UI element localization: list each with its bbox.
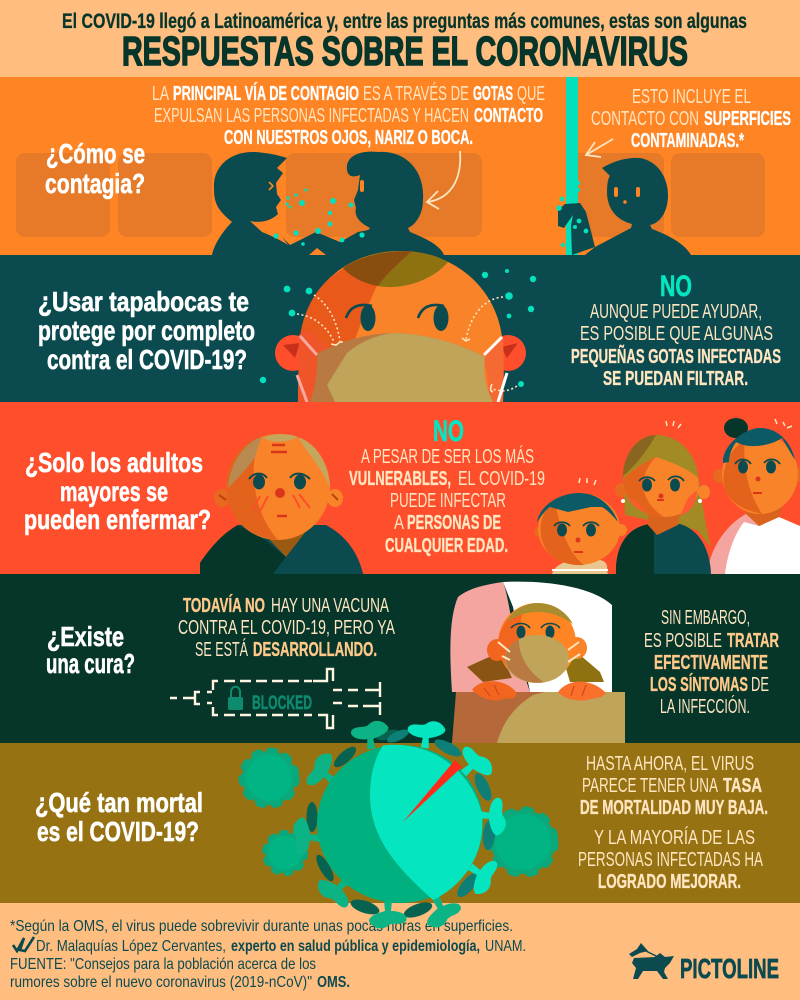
- heading: cura: ¿Existe: [47, 621, 124, 652]
- person coughing: [212, 152, 378, 255]
- text: via de contagio: ES A TRAVÉS DE: [363, 82, 469, 105]
- droplets on pole and hand: [556, 181, 588, 247]
- droplets: [260, 269, 536, 387]
- illustration: head with mask: [260, 251, 536, 402]
- header band: [0, 0, 800, 77]
- panel: cura: [0, 574, 800, 743]
- illustration: person with bun: [708, 418, 800, 574]
- body: [317, 745, 483, 903]
- dotted droplet paths: [297, 295, 517, 391]
- text: cualquier edad: PUEDE INFECTAR: [390, 490, 506, 512]
- illustration: small virus bottom left: [265, 833, 305, 873]
- text: superficies: [591, 86, 791, 152]
- mask: [505, 635, 569, 683]
- icon: lock: [228, 687, 243, 710]
- background windows: [16, 153, 765, 237]
- footer notes: experto en salud pública y epidemiología,: [231, 938, 480, 955]
- heading: cura: una cura?: [46, 648, 135, 679]
- heading: mortalidad: [35, 787, 203, 847]
- heading: adultos mayores: mayores se: [60, 476, 168, 507]
- pole: [566, 77, 578, 255]
- heading: cura: [46, 621, 135, 679]
- panel: tapabocas: [0, 251, 800, 402]
- text: via de contagio: LA: [152, 83, 169, 105]
- panel: mortalidad: [0, 743, 800, 903]
- heading: tapabocas: ¿Usar tapabocas te: [38, 286, 249, 317]
- illustration: child: [534, 478, 627, 574]
- icon: orange gap between arms: [309, 248, 326, 255]
- text: superficies: CONTACTO CON: [591, 108, 699, 130]
- icon: arrow to pole: [586, 139, 613, 157]
- footer band: [0, 903, 800, 1000]
- dark protein spikes: [306, 727, 496, 921]
- heading: mortalidad: es el COVID-19?: [37, 816, 199, 847]
- text: vacuna: TODAVÍA NO: [183, 594, 265, 617]
- text: vacuna: CONTRA EL COVID-19, PERO YA: [178, 617, 395, 639]
- icon: curved arrow to face: [427, 151, 460, 209]
- text: cualquier edad: VULNERABLES,: [349, 468, 451, 490]
- text: tasa de mortalidad: [578, 753, 768, 893]
- text: cualquier edad: CUALQUIER EDAD.: [385, 535, 508, 557]
- answer: no: NO: [433, 415, 464, 448]
- heading: tapabocas: [38, 286, 255, 375]
- text: via de contagio: CON NUESTROS OJOS, NARIZ O BOCA.: [224, 127, 473, 149]
- footer notes: rumores sobre el nuevo coronavirus (2019-nCoV)": [10, 974, 312, 991]
- text: tasa de mortalidad: TASA: [723, 775, 762, 797]
- illustration: woman: [615, 421, 711, 574]
- bed: [452, 692, 625, 743]
- heading: mortalidad: ¿Qué tan mortal: [35, 787, 203, 818]
- text: tasa de mortalidad: PARECE TENER UNA: [582, 775, 718, 797]
- logo: pictoline: [629, 943, 779, 984]
- text: via de contagio: PRINCIPAL VÍA DE CONTAGIO: [173, 82, 359, 105]
- text: vacuna: SE ESTÁ: [195, 638, 248, 661]
- mask: [310, 333, 493, 402]
- icon: double check: [13, 937, 34, 951]
- heading: como se contagia: contagia?: [45, 168, 145, 199]
- text: vacuna: [178, 594, 395, 661]
- text: via de contagio: [152, 82, 545, 149]
- illustration: older man: [200, 434, 363, 574]
- illustration: small virus top left: [242, 751, 296, 805]
- text: vacuna: DESARROLLANDO.: [253, 639, 377, 661]
- heading: tapabocas: protege por completo: [38, 315, 255, 346]
- heading: adultos mayores: [24, 447, 211, 535]
- illustration: sick person in bed: [450, 582, 625, 743]
- needle: [403, 760, 462, 822]
- hands: [472, 681, 516, 700]
- text: tapabocas: [571, 301, 781, 390]
- text: cualquier edad: [349, 445, 545, 557]
- mask straps: [297, 336, 317, 402]
- panel: como se contagia: [0, 77, 800, 255]
- text: cualquier edad: EL COVID-19: [458, 468, 545, 490]
- icon: blocked syringe: [170, 669, 380, 728]
- spikes light: [406, 719, 508, 898]
- heading: tapabocas: contra el COVID-19?: [47, 344, 247, 375]
- text: via de contagio: QUE: [517, 83, 545, 105]
- text: sintomas: ES POSIBLE: [644, 630, 722, 652]
- heading: adultos mayores: ¿Solo los adultos: [25, 447, 203, 478]
- label: blocked: BLOCKED: [252, 693, 312, 714]
- footer notes: UNAM.: [485, 938, 526, 955]
- footer notes: *Según la OMS, el virus puede sobrevivir durante unas pocas horas en superficies.: [10, 918, 513, 935]
- heading: como se contagia: ¿Cómo se: [46, 138, 145, 169]
- text: sintomas: [644, 607, 779, 718]
- illustration: main virus: [291, 719, 508, 931]
- spikes medium green: [291, 720, 465, 931]
- illustration: small virus right: [491, 810, 555, 874]
- icon: eyes and nose: [614, 187, 640, 204]
- text: cualquier edad: A: [394, 512, 404, 534]
- text: vacuna: HAY UNA VACUNA: [271, 595, 389, 617]
- text: via de contagio: EXPULSAN LAS PERSONAS INFECTADAS Y HACEN: [154, 105, 469, 127]
- person touching pole: [558, 158, 691, 255]
- droplets: [273, 188, 365, 246]
- text: via de contagio: CONTACTO: [474, 105, 543, 127]
- footer notes: FUENTE: "Consejos para la población acerca de los: [10, 956, 316, 973]
- footer notes: OMS.: [317, 974, 350, 991]
- text: sintomas: LOS SÍNTOMAS: [650, 673, 748, 696]
- icon: coughing face details: [269, 182, 273, 190]
- footer notes: Dr. Malaquías López Cervantes,: [36, 938, 226, 955]
- icon: ear: [360, 180, 364, 192]
- person receiving droplets: [345, 152, 444, 255]
- footer notes: [10, 918, 526, 991]
- panel: adultos mayores: [0, 402, 800, 574]
- text: sintomas: DE: [751, 674, 769, 696]
- text: via de contagio: GOTAS: [473, 83, 513, 105]
- eyes: [360, 305, 448, 331]
- text: cualquier edad: PERSONAS DE: [407, 512, 501, 534]
- heading: adultos mayores: pueden enfermar?: [24, 504, 211, 535]
- text: cualquier edad: A PESAR DE SER LOS MÁS: [361, 445, 534, 468]
- answer: no: NO: [660, 270, 692, 303]
- heading: como se contagia: [45, 138, 145, 199]
